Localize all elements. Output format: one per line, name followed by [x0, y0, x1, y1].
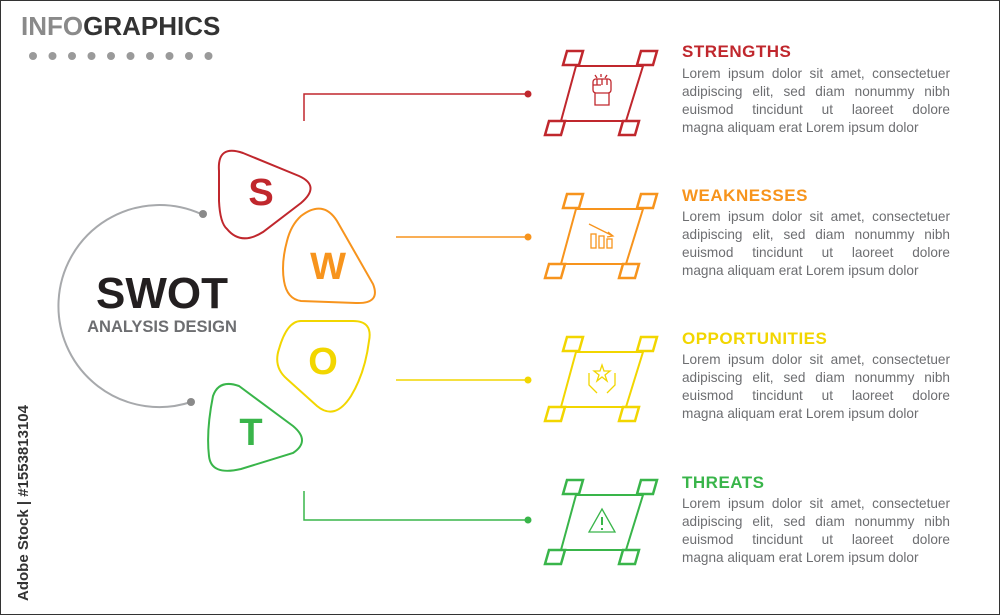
weaknesses text: WEAKNESSES [682, 186, 808, 205]
shape W [283, 209, 375, 303]
icon: hands with star [589, 365, 615, 393]
shape O: O [308, 341, 338, 383]
icon: warning [589, 509, 615, 532]
frame: strengths [545, 51, 657, 135]
text: magna aliquam erat Lorem ipsum dolor [682, 120, 918, 135]
text: magna aliquam erat Lorem ipsum dolor [682, 406, 918, 421]
shape T: T [239, 412, 263, 454]
text: Lorem ipsum dolor sit amet, consectetuer adipiscing elit, sed diam nonummy nibh euismod tincidunt ut laoreet dolore [682, 66, 950, 117]
text: Lorem ipsum dolor sit amet, consectetuer adipiscing elit, sed diam nonummy nibh euismod tincidunt ut laoreet dolore [682, 496, 950, 547]
text: magna aliquam erat Lorem ipsum dolor [682, 263, 918, 278]
center text [87, 269, 237, 336]
shape W: W [310, 246, 346, 288]
grey arc [58, 205, 207, 407]
text: magna aliquam erat Lorem ipsum dolor [682, 550, 918, 565]
strengths text: STRENGTHS [682, 42, 791, 61]
shape S: S [248, 172, 274, 214]
text: Lorem ipsum dolor sit amet, consectetuer adipiscing elit, sed diam nonummy nibh euismod tincidunt ut laoreet dolore [682, 209, 950, 260]
connectors [304, 90, 532, 524]
icon: declining bars [589, 224, 613, 248]
center text: ANALYSIS DESIGN [87, 318, 237, 336]
frame: threats [545, 480, 657, 564]
frame: weaknesses [545, 194, 657, 278]
title: INFOGRAPHICS [21, 11, 220, 41]
shape O [277, 321, 370, 412]
opportunities text: OPPORTUNITIES [682, 329, 827, 348]
text: Lorem ipsum dolor sit amet, consectetuer adipiscing elit, sed diam nonummy nibh euismod tincidunt ut laoreet dolore [682, 352, 950, 403]
center text: SWOT [96, 269, 228, 318]
icon: fist [593, 74, 611, 105]
watermark side text: Adobe Stock | #1553813104 [15, 404, 32, 601]
frame: opportunities [545, 337, 657, 421]
shape S [219, 151, 311, 238]
shape T [208, 384, 302, 471]
threats text: THREATS [682, 473, 765, 492]
